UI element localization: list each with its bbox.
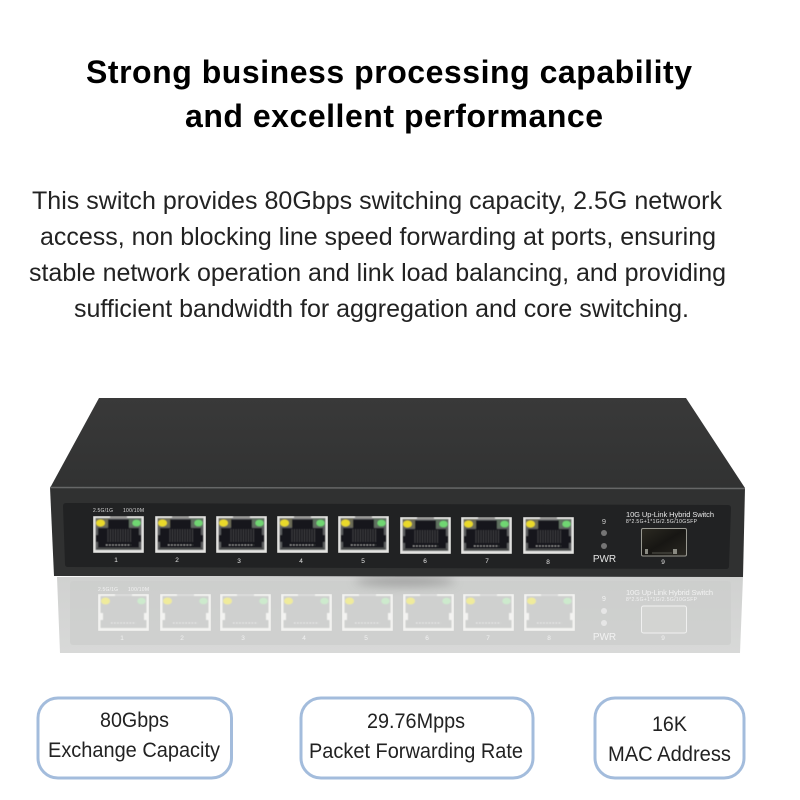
stat card: MAC address: 16K	[652, 713, 687, 736]
switch reflection: 2.5G/1G	[98, 587, 118, 593]
stat card: exchange capacity: 80Gbps	[100, 709, 169, 732]
switch reflection: 6	[425, 635, 429, 642]
port numbers: 3	[237, 558, 241, 565]
RJ45 ports 1 to 8	[93, 516, 574, 554]
switch reflection	[57, 576, 743, 653]
stat card: packet forwarding rate	[301, 698, 533, 778]
uplink label: 10G Up-Link Hybrid Switch	[626, 510, 714, 519]
switch top cover	[50, 398, 745, 488]
port legend labels: 100/10M	[123, 508, 144, 514]
description text block: access, non blocking line speed forwarding at ports, ensuring	[40, 223, 716, 251]
port numbers: 8	[546, 559, 550, 566]
status indicators	[593, 517, 616, 565]
stat card: MAC address	[595, 698, 744, 778]
switch reflection: 1	[120, 635, 124, 642]
switch reflection: 9	[661, 635, 665, 642]
switch reflection: 5	[364, 635, 368, 642]
stat card: exchange capacity: Exchange Capacity	[48, 739, 220, 762]
title: and excellent performance	[185, 98, 603, 134]
stat card: packet forwarding rate: Packet Forwarding Rate	[309, 740, 523, 763]
network switch	[50, 398, 745, 577]
uplink label: 8*2.5G+1*1G/2.5G/10GSFP	[626, 519, 698, 525]
switch reflection: 3	[241, 635, 245, 642]
switch front face	[50, 487, 745, 577]
port numbers: 4	[299, 558, 303, 565]
uplink label	[626, 510, 714, 525]
port numbers: 2	[175, 557, 179, 564]
switch reflection: 7	[486, 635, 490, 642]
port numbers: 7	[485, 558, 489, 565]
switch reflection: 8	[547, 635, 551, 642]
port legend labels: 2.5G/1G	[93, 508, 113, 514]
description text block: This switch provides 80Gbps switching capacity, 2.5G network	[32, 187, 722, 215]
title: Strong business processing capability	[86, 54, 692, 90]
SFP port	[642, 528, 686, 566]
switch reflection: 2	[180, 635, 184, 642]
switch reflection: 10G Up-Link Hybrid Switch	[626, 588, 713, 597]
port numbers: 6	[423, 558, 427, 565]
status indicators: PWR	[593, 554, 616, 565]
stat card: exchange capacity	[38, 698, 232, 778]
title	[86, 54, 692, 134]
port numbers	[114, 557, 550, 566]
switch reflection: PWR	[593, 632, 616, 643]
port panel	[63, 503, 731, 569]
stat card: MAC address: MAC Address	[608, 743, 731, 766]
description text block: stable network operation and link load balancing, and providing	[29, 259, 726, 287]
status indicators: 9	[602, 517, 606, 526]
switch reflection: 9	[602, 596, 606, 603]
description text block	[29, 187, 726, 323]
SFP port: 9	[661, 559, 665, 566]
switch reflection: 8*2.5G+1*1G/2.5G/10GSFP	[626, 597, 698, 603]
stat card: packet forwarding rate: 29.76Mpps	[367, 710, 465, 733]
port numbers: 1	[114, 557, 118, 564]
port numbers: 5	[361, 558, 365, 565]
port legend labels	[93, 508, 144, 514]
switch reflection: 4	[302, 635, 306, 642]
description text block: sufficient bandwidth for aggregation and core switching.	[74, 295, 689, 323]
switch reflection: 100/10M	[128, 587, 149, 593]
